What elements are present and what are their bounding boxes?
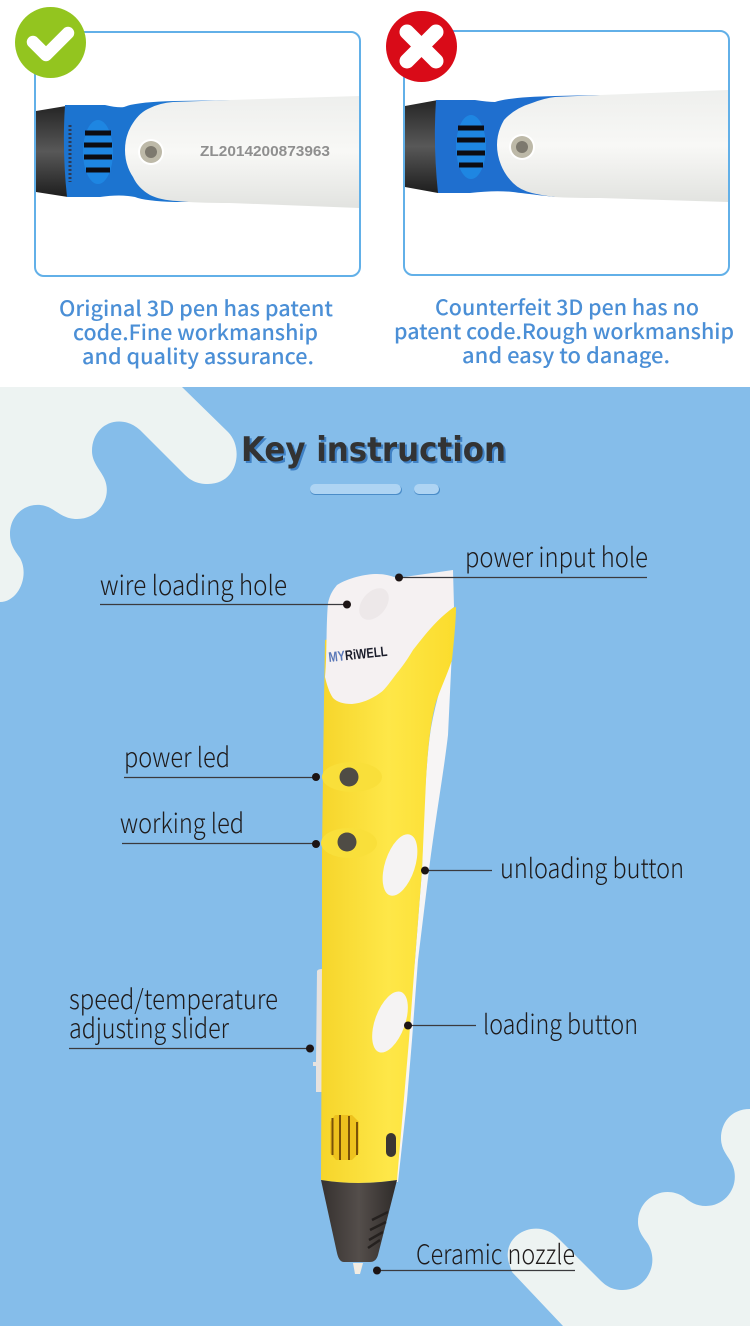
pen white cap	[325, 570, 454, 704]
photo frame: original	[35, 32, 360, 276]
label: unloading button: unloading button	[500, 847, 684, 886]
caption: counterfeit: and easy to danage.	[462, 340, 670, 370]
label: wire loading hole: wire loading hole	[100, 564, 287, 603]
label: working led	[120, 802, 320, 848]
unloading button oval	[376, 830, 424, 900]
vent grille	[330, 1115, 359, 1160]
pen slider	[313, 969, 322, 1092]
title: Key instruction	[241, 430, 506, 470]
label: loading button	[404, 1003, 638, 1042]
illustration: 3D pen	[313, 570, 456, 1274]
caption: original: code.Fine workmanship	[73, 317, 318, 347]
working led	[338, 832, 356, 852]
caption: original	[59, 293, 333, 371]
title underline bars	[310, 484, 440, 495]
caption: original: Original 3D pen has patent	[59, 293, 333, 323]
label: power led: power led	[124, 736, 230, 775]
photo: original pen with patent code: ZL2014200873963	[200, 144, 330, 160]
caption: counterfeit: patent code.Rough workmanship	[394, 316, 734, 346]
caption: counterfeit	[394, 292, 734, 370]
label: ceramic nozzle	[373, 1233, 575, 1274]
side port	[386, 1133, 396, 1157]
black nozzle cone	[321, 1180, 397, 1262]
icon: red cross	[386, 11, 457, 82]
pen rear white strip	[392, 650, 452, 1182]
led glow: working	[321, 828, 377, 858]
label: ceramic nozzle: Ceramic nozzle	[416, 1233, 575, 1272]
panel: original pen comparison	[15, 7, 360, 371]
label: power input hole: power input hole	[465, 536, 648, 575]
label: power input hole	[395, 536, 648, 582]
label: working led: working led	[120, 802, 244, 841]
icon: green check	[15, 7, 86, 78]
label: speed/temperature adjusting slider: adjusting slider	[69, 1007, 229, 1046]
nozzle grip lines	[368, 1212, 388, 1248]
photo: original pen with patent code	[36, 96, 359, 208]
panel: counterfeit pen comparison	[386, 11, 734, 370]
label: power led	[124, 736, 320, 781]
wire loading hole	[353, 582, 395, 626]
title: Key instruction	[243, 432, 508, 472]
caption: original: and quality assurance.	[82, 341, 314, 371]
label: unloading button	[421, 847, 684, 886]
label: loading button: loading button	[483, 1003, 638, 1042]
photo frame: counterfeit	[404, 31, 729, 275]
ceramic tip	[353, 1263, 363, 1274]
loading button oval	[365, 987, 415, 1057]
brand logo: MYRiWELL	[328, 643, 388, 665]
caption: counterfeit: Counterfeit 3D pen has no	[435, 292, 699, 322]
label: speed/temperature adjusting slider: speed/temperature	[69, 978, 278, 1017]
pen yellow body	[321, 607, 456, 1183]
panel: key instruction background	[0, 387, 750, 1326]
label: speed/temperature adjusting slider	[69, 978, 314, 1052]
photo: counterfeit pen without code	[405, 90, 728, 202]
led glow: power	[322, 762, 382, 792]
power led	[340, 768, 358, 786]
